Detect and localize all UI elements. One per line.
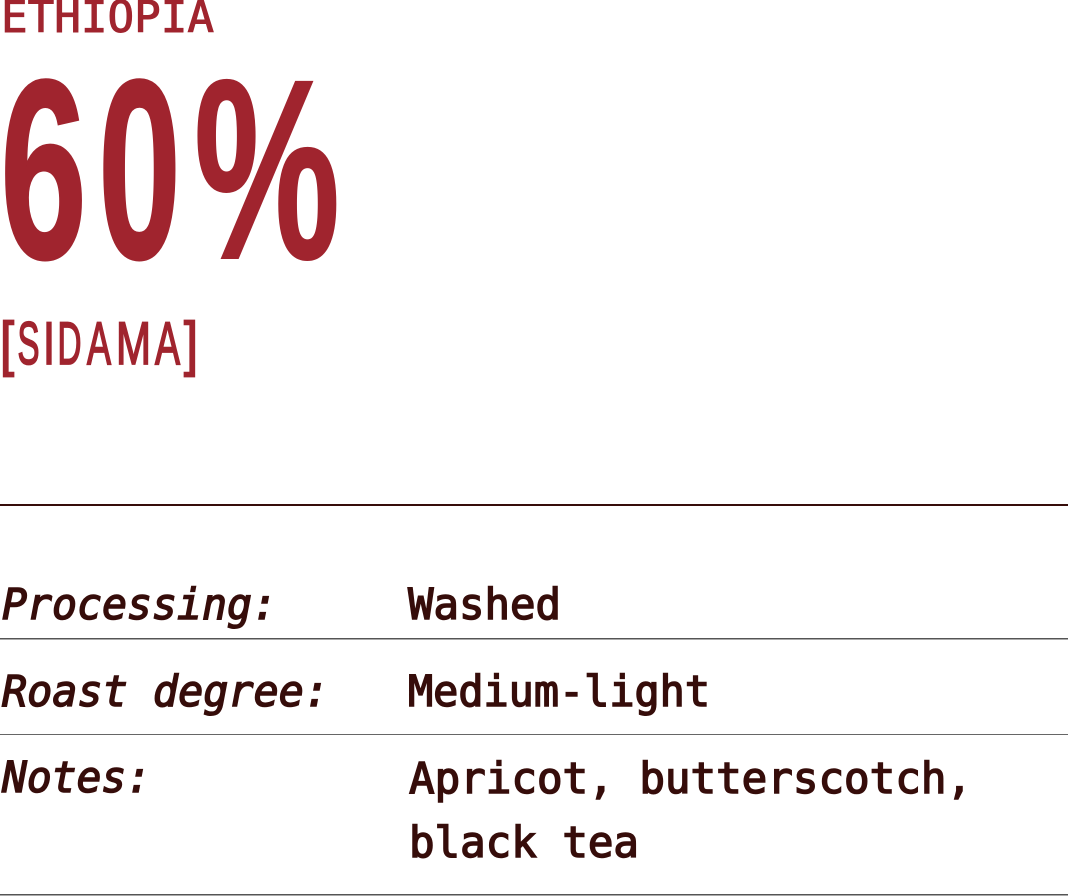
region label: Sidama: A bbox=[87, 310, 111, 377]
region label: Sidama: ] bbox=[184, 310, 198, 377]
row: processing: Washed bbox=[408, 581, 561, 630]
region label: Sidama bbox=[0, 310, 198, 377]
row: roast degree: Roast degree: bbox=[2, 668, 329, 717]
row: notes: black tea bbox=[409, 819, 639, 868]
big percentage: 60%: 0 bbox=[98, 27, 181, 313]
divider: bottom bbox=[0, 894, 1068, 896]
row: processing: Processing: bbox=[2, 581, 277, 630]
region label: Sidama: S bbox=[18, 310, 40, 377]
region label: Sidama: M bbox=[116, 310, 151, 377]
divider: top bbox=[0, 504, 1068, 506]
row: notes bbox=[1, 754, 972, 868]
big percentage: 60% bbox=[0, 27, 340, 313]
divider: roast degree bbox=[0, 734, 1068, 735]
row: roast degree: Medium-light bbox=[408, 668, 710, 717]
row: notes: Apricot, butterscotch, bbox=[409, 755, 972, 804]
big percentage: 60%: % bbox=[194, 27, 340, 313]
region label: Sidama: A bbox=[155, 310, 180, 377]
row: processing bbox=[2, 581, 561, 630]
region label: Sidama: D bbox=[58, 310, 82, 377]
region label: Sidama: [ bbox=[0, 310, 14, 377]
big percentage: 60%: 6 bbox=[0, 27, 87, 313]
region label: Sidama: I bbox=[43, 310, 55, 377]
row: roast degree bbox=[2, 668, 710, 717]
divider: processing bbox=[0, 638, 1068, 640]
row: notes: Notes: bbox=[1, 754, 151, 803]
